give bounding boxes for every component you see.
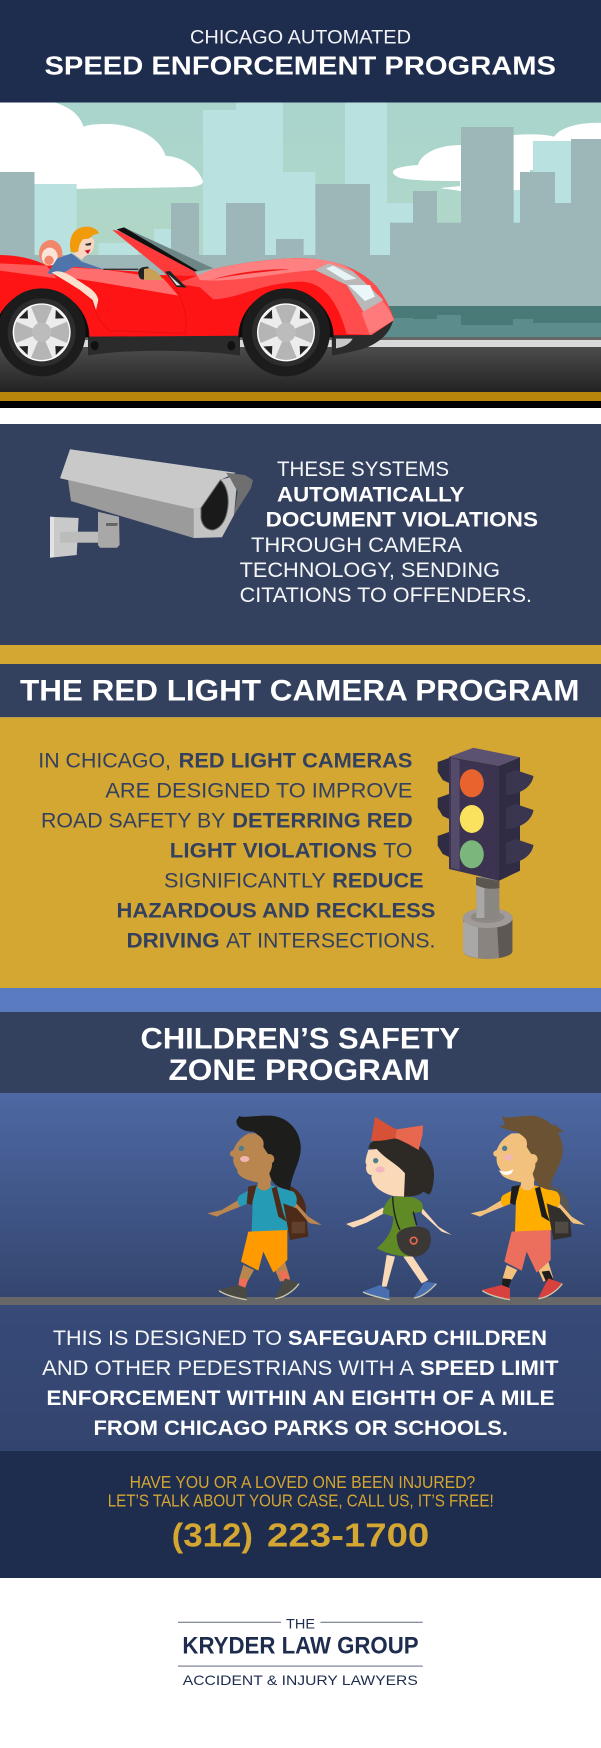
text block: red light cameras: LIGHT VIOLATIONS (170, 839, 377, 862)
text block: camera systems: THROUGH CAMERA (251, 534, 462, 557)
text block: red light cameras (38, 749, 435, 952)
heading: children's safety zone program: ZONE PROGRAM (168, 1054, 430, 1087)
water (380, 306, 601, 337)
text block: red light cameras: AT INTERSECTIONS. (226, 929, 435, 952)
logo: The Kryder Law Group (178, 1615, 423, 1688)
driver head (70, 227, 99, 260)
phone number (172, 1518, 429, 1555)
title line 2: SPEED ENFORCEMENT PROGRAMS (44, 51, 556, 81)
panel: red light camera program (0, 717, 601, 988)
yellow lamp (460, 805, 484, 833)
text block: safeguard children: FROM CHICAGO PARKS OR SCHOOLS. (94, 1417, 508, 1440)
heading: children's safety zone program (0, 1012, 601, 1093)
heading: children's safety zone program: CHILDREN’S SAFETY (140, 1022, 460, 1055)
headlight (315, 263, 383, 312)
wheel arches (0, 290, 334, 337)
seat headrest (39, 240, 62, 267)
gold stripe (0, 645, 601, 664)
text block: red light cameras: DRIVING (126, 929, 220, 952)
icon: traffic light (438, 748, 534, 959)
illustration: city skyline and road (0, 102, 601, 408)
light buildings (34, 102, 571, 303)
green lamp (460, 840, 484, 868)
text block: camera systems (240, 458, 538, 607)
text block: safeguard children: THIS IS DESIGNED TO (53, 1327, 282, 1350)
panel: children's safety description (0, 1305, 601, 1451)
heading: red light camera program (0, 664, 601, 717)
text block: red light cameras: REDUCE (332, 869, 423, 892)
text block: camera systems: CITATIONS TO OFFENDERS. (240, 584, 532, 607)
icon: security camera (50, 449, 253, 558)
road (0, 337, 601, 340)
front wheel (242, 288, 330, 376)
red lamp (460, 769, 484, 797)
text block: camera systems: TECHNOLOGY, SENDING (240, 559, 500, 582)
text block: safeguard children: AND OTHER PEDESTRIANS WITH A (42, 1357, 414, 1380)
call to action text: LET’S TALK ABOUT YOUR CASE, CALL US, IT’S FREE! (108, 1491, 494, 1511)
mirror and hand on steering wheel (103, 267, 187, 288)
panel: children walking illustration (0, 1093, 601, 1305)
child 3 (471, 1116, 585, 1300)
text block: safeguard children: ENFORCEMENT WITHIN AN EIGHTH OF A MILE (46, 1387, 555, 1410)
blue band (0, 988, 601, 1012)
clouds (0, 102, 601, 191)
text block: red light cameras: SIGNIFICANTLY (164, 869, 326, 892)
text block: camera systems: AUTOMATICALLY (277, 484, 464, 507)
text block: safeguard children: SPEED LIMIT (420, 1357, 559, 1380)
text block: camera systems: DOCUMENT VIOLATIONS (266, 509, 538, 532)
panel: call to action (0, 1451, 601, 1578)
logo: The Kryder Law Group: KRYDER LAW GROUP (182, 1632, 419, 1659)
logo: The Kryder Law Group: THE (286, 1615, 315, 1631)
car underbody (88, 320, 393, 356)
illustration: red convertible car with driver (0, 227, 394, 376)
title line 1: CHICAGO AUTOMATED (190, 26, 411, 48)
call to action text (108, 1472, 494, 1511)
text block: red light cameras: TO (383, 839, 412, 862)
text block: red light cameras: RED LIGHT CAMERAS (179, 749, 412, 772)
windshield (112, 227, 213, 288)
car highlights (0, 258, 394, 335)
text block: red light cameras: ROAD SAFETY BY (41, 809, 225, 832)
text block: safeguard children: SAFEGUARD CHILDREN (288, 1327, 547, 1350)
child 2 (346, 1117, 452, 1300)
child 1 (207, 1116, 322, 1300)
car body (0, 255, 394, 347)
rear wheel (0, 288, 86, 376)
text block: camera systems: THESE SYSTEMS (277, 458, 449, 481)
phone number: 223-1700 (267, 1518, 429, 1555)
dark buildings (0, 127, 601, 315)
text block: red light cameras: ARE DESIGNED TO IMPROVE (105, 779, 412, 802)
text block: red light cameras: HAZARDOUS AND RECKLESS (116, 899, 435, 922)
text block: red light cameras: IN CHICAGO, (38, 749, 171, 772)
ground line (0, 1297, 601, 1305)
phone number: (312) (172, 1518, 253, 1555)
text block: safeguard children (42, 1327, 559, 1440)
driver shirt and arm (47, 253, 104, 310)
heading: red light camera program: THE RED LIGHT CAMERA PROGRAM (20, 675, 580, 708)
header (0, 0, 601, 102)
call to action text: HAVE YOU OR A LOVED ONE BEEN INJURED? (130, 1472, 476, 1492)
text block: red light cameras: DETERRING RED (232, 809, 413, 832)
panel: camera systems (0, 424, 601, 645)
logo: The Kryder Law Group: ACCIDENT & INJURY LAWYERS (183, 1672, 418, 1688)
